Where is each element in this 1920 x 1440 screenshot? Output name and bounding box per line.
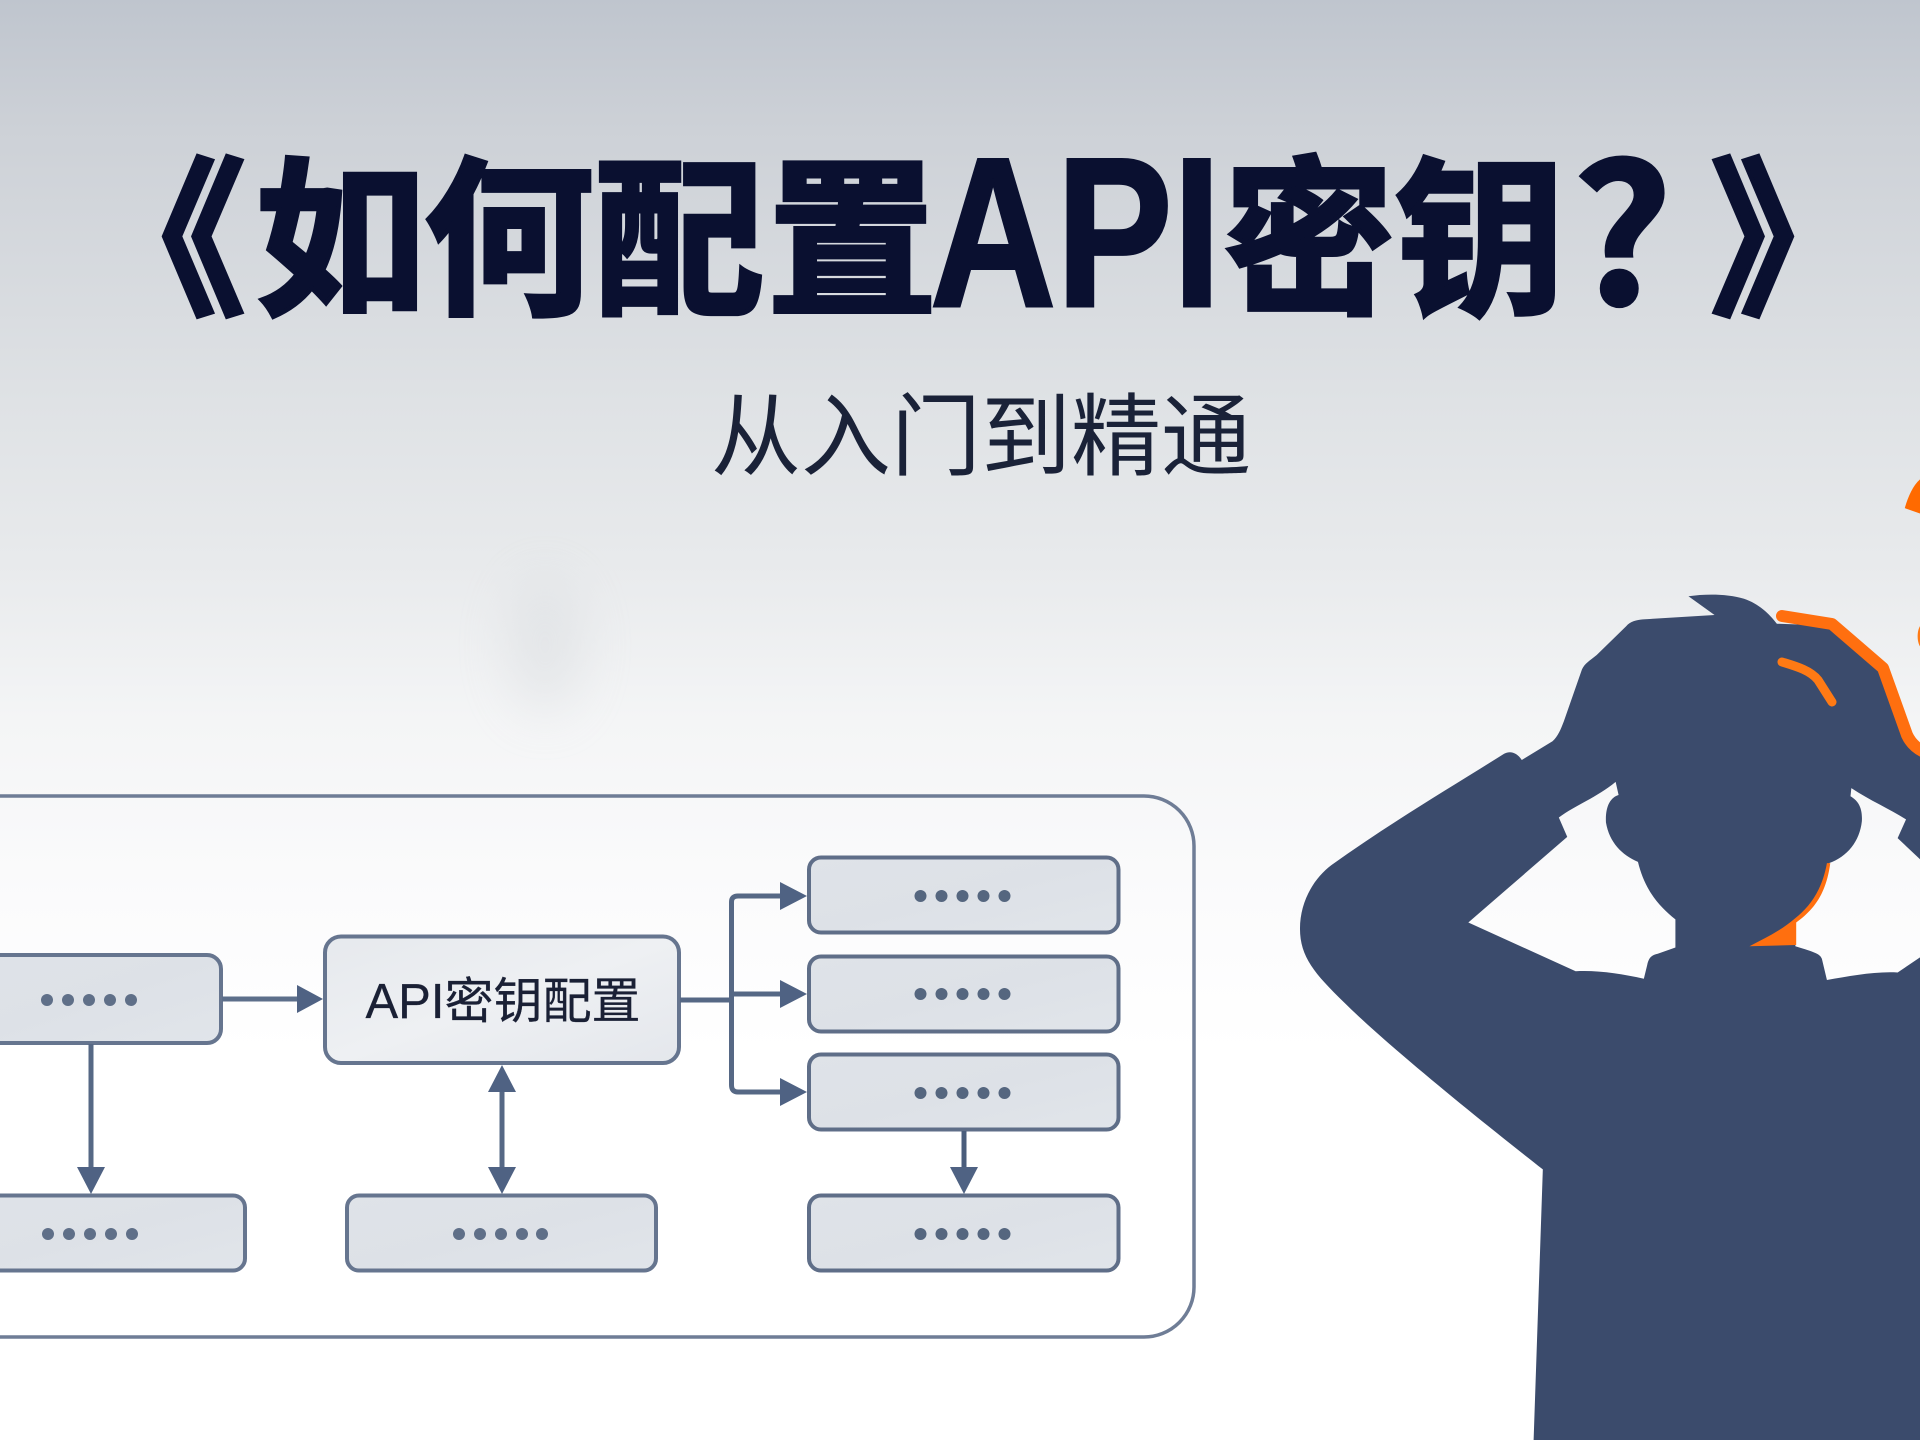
title: 置 (767, 148, 937, 338)
orange question mark dot (1918, 625, 1920, 648)
title: 密 (1224, 148, 1394, 338)
subtitle: 从入门到精通 (711, 388, 1251, 488)
arrow: right box 3 to right box 4 (950, 1131, 978, 1194)
box: left upper (0, 955, 221, 1043)
box: API key configuration: API密钥配置 (366, 975, 640, 1029)
figure: confused person silhouette (1300, 479, 1920, 1440)
panel frame (0, 796, 1194, 1337)
orange outline on hand (1782, 616, 1920, 752)
arrow: left box to API box (222, 985, 323, 1013)
arrow: left box down (77, 1044, 105, 1194)
title: 如 (256, 148, 426, 338)
orange accent at neck (1749, 863, 1830, 946)
orange accent on hand (1782, 662, 1832, 702)
orange question mark fragment (1905, 479, 1920, 514)
title: ? (1572, 83, 1673, 359)
box: right 1 (809, 858, 1118, 932)
title: 《 (76, 148, 246, 338)
arrow: double-headed API box to lower box (488, 1065, 516, 1194)
title: API (930, 115, 1221, 352)
box: API key configuration (325, 936, 679, 1063)
box: right 2 (809, 956, 1118, 1032)
box: middle lower (347, 1196, 656, 1270)
arrow: branching to three right boxes (680, 882, 807, 1106)
panel: API key configuration flowchart (0, 796, 1194, 1337)
box: right 4 (809, 1196, 1118, 1270)
box: right 3 (809, 1054, 1118, 1130)
box: left lower (0, 1196, 245, 1270)
title: 配 (594, 148, 764, 338)
title: 何 (424, 148, 594, 338)
title: 钥 (1395, 148, 1565, 338)
title: 》 (1710, 148, 1880, 338)
title (76, 83, 1880, 359)
silhouette body (1300, 595, 1920, 1440)
